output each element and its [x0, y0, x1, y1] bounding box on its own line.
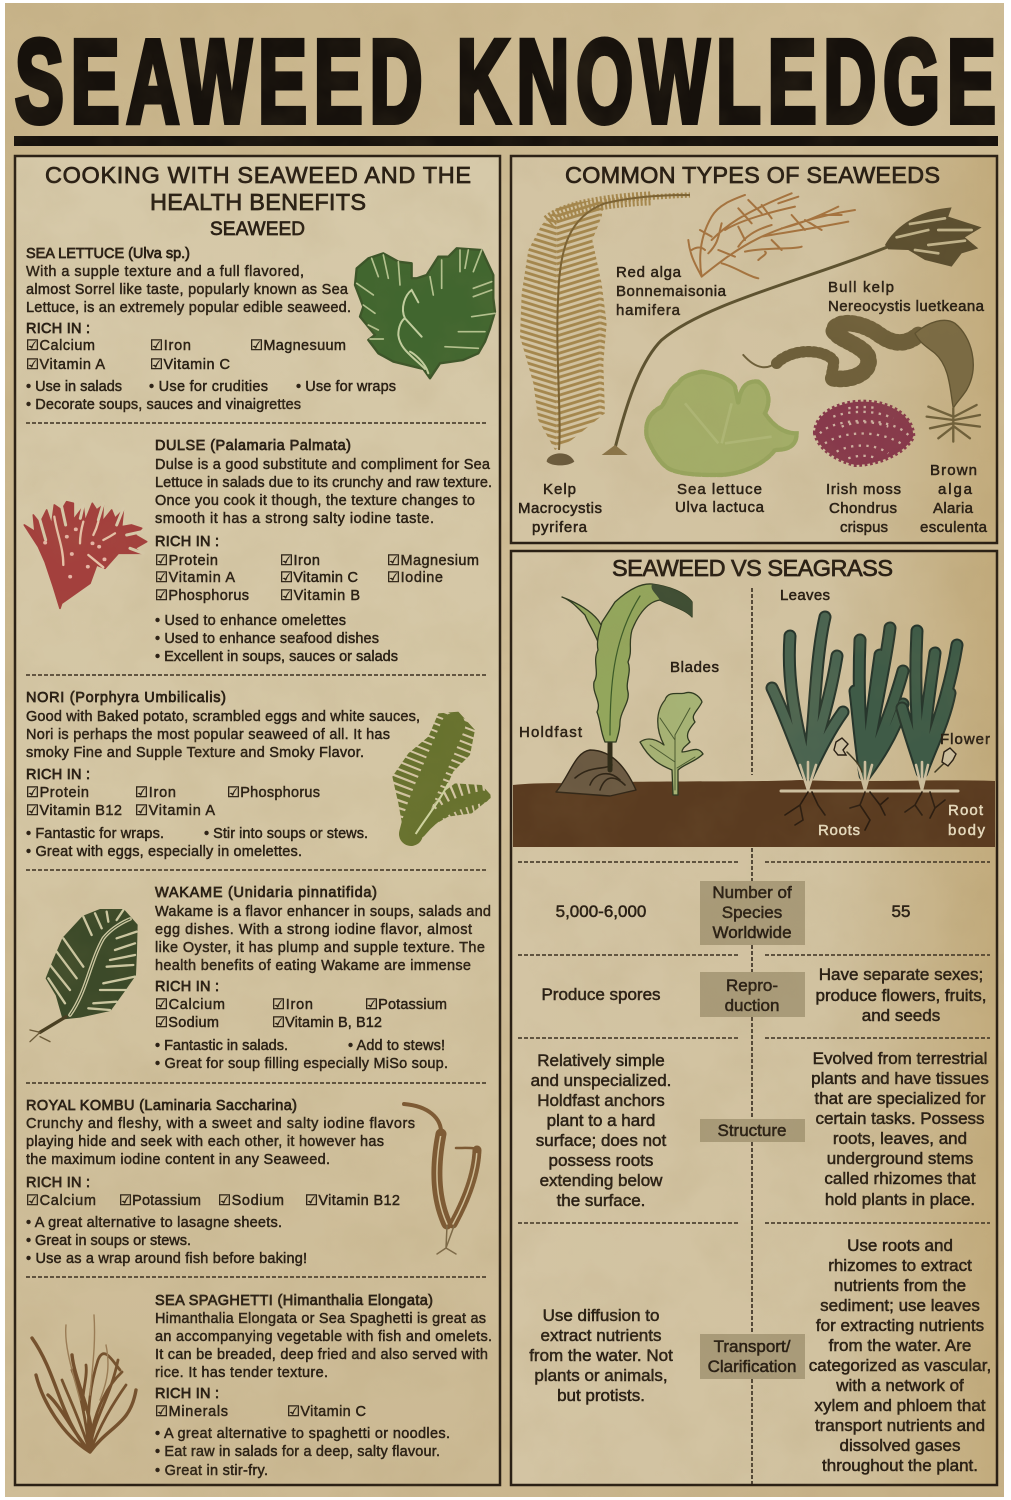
row: transport: [529, 1236, 991, 1475]
label box: structure: [700, 1119, 805, 1142]
nori nutrients: ☑Vitamin B12: [26, 803, 122, 819]
dulse description: [155, 438, 492, 527]
icon: sea lettuce: [355, 248, 495, 378]
diagram labels: Blades: [670, 659, 719, 676]
royal kombu uses: [26, 1215, 307, 1267]
wakame description: [155, 885, 491, 974]
label box: number of species: Worldwide: [712, 923, 792, 942]
section: sea spaghetti: [32, 1293, 492, 1479]
seagrass transport text: [809, 1236, 991, 1475]
seagrass transport text: Use roots and: [847, 1236, 953, 1255]
dulse nutrients: ☑Vitamin B: [280, 588, 360, 604]
seagrass transport text: sediment; use leaves: [820, 1296, 980, 1315]
royal kombu nutrients: ☑Vitamin B12: [305, 1193, 400, 1209]
nori nutrients: ☑Phosphorus: [227, 785, 320, 801]
royal kombu description: Crunchy and fleshy, with a sweet and salty iodine flavors: [26, 1116, 415, 1132]
illustration: sea lettuce: [646, 372, 797, 475]
label box: number of species: [700, 881, 805, 945]
dulse nutrients: ☑Vitamin A: [155, 570, 235, 586]
labels: common types: alga: [938, 481, 973, 498]
seagrass plant 2: [855, 628, 903, 775]
diagram labels: Flower: [940, 731, 990, 748]
sea spaghetti uses: • Eat raw in salads for a deep, salty flavour.: [155, 1444, 440, 1460]
seaweed structure text: the surface.: [557, 1191, 645, 1210]
section: nori: [26, 690, 493, 860]
nori nutrients: [26, 767, 320, 819]
wakame nutrients: [155, 979, 447, 1031]
seagrass transport text: transport nutrients and: [815, 1416, 985, 1435]
royal kombu uses: • A great alternative to lasagne sheets.: [26, 1215, 282, 1231]
wakame description: health benefits of eating Wakame are immense: [155, 958, 471, 974]
dulse description: Once you cook it though, the texture changes to: [155, 493, 475, 509]
wakame description: like Oyster, it has plump and supple texture. The: [155, 940, 485, 956]
wakame description: Wakame is a flavor enhancer in soups, salads and: [155, 904, 491, 920]
wakame nutrients: ☑Iron: [272, 997, 313, 1013]
sea lettuce description: SEA LETTUCE (Ulva sp.): [26, 246, 190, 262]
label box: transport: Clarification: [708, 1357, 796, 1376]
dulse nutrients: RICH IN :: [155, 534, 219, 550]
seagrass reproduction text: produce flowers, fruits,: [815, 986, 987, 1005]
labels: common types: hamifera: [616, 302, 681, 319]
dulse uses: • Used to enhance omelettes: [155, 613, 346, 629]
seagrass structure text: roots, leaves, and: [833, 1129, 967, 1148]
sea spaghetti description: Himanthalia Elongata or Sea Spaghetti is great as: [155, 1311, 486, 1327]
dulse uses: • Excellent in soups, sauces or salads: [155, 649, 398, 665]
wakame nutrients: ☑Potassium: [365, 997, 447, 1013]
sea lettuce uses: • Use for wraps: [296, 379, 396, 395]
wakame nutrients: RICH IN :: [155, 979, 219, 995]
sea spaghetti description: rice. It has tender texture.: [155, 1365, 328, 1381]
nori nutrients: ☑Protein: [26, 785, 89, 801]
labels: common types: Bonnemaisonia: [616, 283, 727, 300]
seagrass reproduction text: and seeds: [862, 1006, 940, 1025]
illustration: seaweed plants: [556, 584, 703, 796]
nori uses: • Stir into soups or stews.: [204, 826, 368, 842]
seaweed structure text: plant to a hard: [547, 1111, 655, 1130]
royal kombu nutrients: ☑Calcium: [26, 1193, 96, 1209]
seagrass structure text: Evolved from terrestrial: [813, 1049, 987, 1068]
sea spaghetti description: SEA SPAGHETTI (Himanthalia Elongata): [155, 1293, 433, 1309]
labels: common types: [518, 264, 988, 536]
dulse nutrients: ☑Magnesium: [387, 553, 479, 569]
panel: cooking with seaweed and the health benefits: [15, 156, 500, 1485]
sea lettuce uses: • Decorate soups, sauces and vinaigrettes: [26, 397, 301, 413]
sea lettuce uses: • Use for crudities: [149, 379, 268, 395]
sea spaghetti nutrients: RICH IN :: [155, 1386, 219, 1402]
seaweed structure text: surface; does not: [536, 1131, 666, 1150]
seaweed structure text: Holdfast anchors: [537, 1091, 665, 1110]
icon: sea spaghetti: [32, 1315, 136, 1452]
row: reproduction: Produce spores: [541, 985, 661, 1004]
sea spaghetti uses: • A great alternative to spaghetti or noodles.: [155, 1426, 450, 1442]
dulse nutrients: ☑Vitamin C: [280, 570, 358, 586]
seagrass structure text: that are specialized for: [814, 1089, 986, 1108]
dulse uses: • Used to enhance seafood dishes: [155, 631, 379, 647]
dulse nutrients: ☑Phosphorus: [155, 588, 249, 604]
sea lettuce uses: [26, 379, 396, 413]
illustration: brown alga: [743, 320, 980, 442]
icon: dulse: [24, 502, 147, 608]
royal kombu description: the maximum iodine content in any Seaweed.: [26, 1152, 330, 1168]
sea spaghetti uses: • Great in stir-fry.: [155, 1463, 268, 1479]
row: number of species: 5,000-6,000: [556, 902, 646, 921]
seaweed structure text: Relatively simple: [537, 1051, 665, 1070]
row: number of species: [556, 881, 910, 945]
sea lettuce nutrients: ☑Vitamin A: [26, 357, 105, 373]
row: structure: [531, 1049, 989, 1210]
panel: common types of seaweeds: [505, 156, 997, 543]
seagrass transport text: categorized as vascular,: [809, 1356, 991, 1375]
sea lettuce nutrients: ☑Iron: [150, 338, 191, 354]
seagrass plant 1: [772, 617, 843, 775]
labels: common types: Chondrus: [829, 500, 897, 517]
seagrass transport text: rhizomes to extract: [828, 1256, 972, 1275]
soil band: [513, 780, 995, 847]
section: wakame: [30, 885, 491, 1072]
seagrass structure text: plants and have tissues: [811, 1069, 989, 1088]
icon: royal kombu: [404, 1104, 477, 1254]
diagram labels: Roots: [818, 822, 860, 839]
sea lettuce nutrients: [26, 321, 346, 373]
icon: nori: [410, 710, 493, 840]
seaweed transport text: extract nutrients: [541, 1326, 661, 1345]
dulse description: Dulse is a good substitute and compliment for Sea: [155, 457, 491, 473]
title: SEAWEED KNOWLEDGE: [15, 15, 996, 147]
seagrass transport text: from the water. Are: [829, 1336, 971, 1355]
nori nutrients: ☑Iron: [135, 785, 176, 801]
labels: common types: pyrifera: [532, 519, 588, 536]
row: number of species: 55: [892, 902, 910, 921]
common types heading: COMMON TYPES OF SEAWEEDS: [565, 162, 940, 188]
dulse uses: [155, 613, 398, 665]
sea spaghetti nutrients: ☑Vitamin C: [287, 1404, 366, 1420]
seagrass transport text: with a network of: [835, 1376, 964, 1395]
label box: transport: Transport/: [714, 1337, 791, 1356]
seagrass transport text: throughout the plant.: [822, 1456, 978, 1475]
diagram labels: body: [948, 822, 986, 839]
illustration: bull kelp: [602, 207, 982, 455]
label box: transport: [700, 1334, 805, 1379]
illustration: red alga: [688, 193, 855, 278]
panel heading: SEAWEED: [210, 219, 305, 240]
diagram labels: Root: [948, 802, 984, 819]
seaweed structure text: and unspecialized.: [531, 1071, 671, 1090]
label box: reproduction: duction: [725, 996, 779, 1015]
royal kombu nutrients: ☑Potassium: [119, 1193, 201, 1209]
seagrass flowers: [834, 738, 956, 772]
dulse nutrients: ☑Iodine: [387, 570, 443, 586]
label box: number of species: Species: [722, 903, 782, 922]
dulse description: smooth it has a strong salty iodine taste.: [155, 511, 434, 527]
wakame uses: • Add to stews!: [348, 1038, 445, 1054]
icon: wakame: [30, 910, 137, 1042]
wakame description: egg dishes. With a strong iodine flavor, almost: [155, 922, 472, 938]
sea lettuce nutrients: ☑Vitamin C: [150, 357, 230, 373]
labels: common types: Bull kelp: [828, 279, 894, 296]
nori uses: • Fantastic for wraps.: [26, 826, 164, 842]
sea lettuce description: Lettuce, is an extremely popular edible seaweed.: [26, 300, 351, 316]
sea spaghetti nutrients: [155, 1386, 366, 1420]
sea lettuce description: With a supple texture and a full flavored,: [26, 264, 304, 280]
seaweed transport text: plants or animals,: [534, 1366, 668, 1385]
diagram labels: Holdfast: [519, 724, 583, 741]
seaweed vs seagrass heading: SEAWEED VS SEAGRASS: [612, 555, 893, 581]
seagrass transport text: dissolved gases: [840, 1436, 960, 1455]
seaweed transport text: Use diffusion to: [543, 1306, 659, 1325]
seagrass structure text: [811, 1049, 989, 1209]
seagrass structure text: certain tasks. Possess: [815, 1109, 985, 1128]
sea lettuce uses: • Use in salads: [26, 379, 122, 395]
royal kombu description: [26, 1098, 415, 1168]
sea spaghetti description: It can be breaded, deep fried and also served with: [155, 1347, 488, 1363]
seagrass structure text: underground stems: [827, 1149, 973, 1168]
diagram labels: Leaves: [780, 587, 830, 604]
sea lettuce nutrients: RICH IN :: [26, 321, 90, 337]
labels: common types: Alaria: [933, 500, 974, 517]
sea spaghetti description: an accompanying vegetable with fish and omelets.: [155, 1329, 492, 1345]
labels: common types: esculenta: [920, 519, 988, 536]
dulse nutrients: [155, 534, 479, 604]
label box: number of species: Number of: [712, 883, 792, 902]
label box: reproduction: [700, 972, 805, 1017]
dulse description: DULSE (Palamaria Palmata): [155, 438, 351, 454]
panel heading: COOKING WITH SEAWEED AND THE: [45, 162, 471, 188]
nori description: Nori is perhaps the most popular seaweed of all. It has: [26, 727, 390, 743]
seaweed structure text: possess roots: [549, 1151, 653, 1170]
wakame nutrients: ☑Vitamin B, B12: [272, 1015, 382, 1031]
royal kombu nutrients: [26, 1175, 400, 1209]
panel heading: HEALTH BENEFITS: [150, 189, 366, 215]
dulse description: Lettuce in salads due to its crunchy and raw texture.: [155, 475, 492, 491]
rhizome and roots: [781, 762, 958, 830]
labels: common types: Sea lettuce: [677, 481, 762, 498]
labels: common types: crispus: [840, 519, 888, 536]
labels: common types: Red alga: [616, 264, 682, 281]
nori description: Good with Baked potato, scrambled eggs and white sauces,: [26, 709, 420, 725]
labels: common types: Ulva lactuca: [675, 499, 765, 516]
seagrass transport text: for extracting nutrients: [816, 1316, 984, 1335]
seaweed structure text: extending below: [540, 1171, 663, 1190]
nori nutrients: RICH IN :: [26, 767, 90, 783]
royal kombu uses: • Use as a wrap around fish before baking!: [26, 1251, 307, 1267]
illustration: kelp: [520, 191, 690, 466]
seagrass structure text: hold plants in place.: [825, 1190, 975, 1209]
seagrass transport text: nutrients from the: [834, 1276, 966, 1295]
wakame description: WAKAME (Unidaria pinnatifida): [155, 885, 377, 901]
seaweed structure text: [531, 1051, 671, 1210]
nori description: smoky Fine and Supple Texture and Smoky Flavor.: [26, 745, 364, 761]
wakame uses: [155, 1038, 448, 1072]
sea spaghetti nutrients: ☑Minerals: [155, 1404, 228, 1420]
wakame nutrients: ☑Sodium: [155, 1015, 219, 1031]
seagrass plant 3: [902, 631, 957, 772]
labels: common types: Irish moss: [826, 481, 901, 498]
royal kombu nutrients: RICH IN :: [26, 1175, 90, 1191]
illustration: seagrass plants: [772, 617, 958, 830]
sea lettuce description: [26, 246, 351, 316]
nori uses: [26, 826, 368, 860]
panel heading: [45, 162, 471, 240]
seagrass structure text: called rhizomes that: [824, 1169, 976, 1188]
seagrass transport text: xylem and phloem that: [814, 1396, 986, 1415]
sea spaghetti uses: [155, 1426, 450, 1479]
sea lettuce nutrients: ☑Magnesuum: [250, 338, 346, 354]
label box: reproduction: Repro-: [726, 976, 778, 995]
royal kombu uses: • Great in soups or stews.: [26, 1233, 191, 1249]
nori uses: • Great with eggs, especially in omelettes.: [26, 844, 302, 860]
wakame uses: • Fantastic in salads.: [155, 1038, 288, 1054]
labels: common types: Macrocystis: [518, 500, 602, 517]
wakame uses: • Great for soup filling especially MiSo soup.: [155, 1056, 448, 1072]
sea lettuce nutrients: ☑Calcium: [26, 338, 95, 354]
illustration: irish moss: [815, 402, 913, 465]
labels: common types: Nereocystis luetkeana: [828, 298, 985, 315]
dulse nutrients: ☑Iron: [280, 553, 320, 569]
seaweed transport text: [529, 1306, 673, 1405]
section: dulse: [24, 438, 492, 665]
section: sea lettuce: [26, 246, 495, 413]
row: reproduction: [541, 965, 987, 1025]
label box: structure: Structure: [718, 1121, 786, 1140]
royal kombu description: playing hide and seek with each other, it however has: [26, 1134, 384, 1150]
seagrass reproduction text: [815, 965, 987, 1025]
nori nutrients: ☑Vitamin A: [135, 803, 215, 819]
diagram labels: [519, 587, 990, 839]
sea lettuce description: almost Sorrel like taste, popularly known as Sea: [26, 282, 349, 298]
nori description: [26, 690, 420, 761]
dulse nutrients: ☑Protein: [155, 553, 218, 569]
seaweed transport text: but protists.: [557, 1386, 645, 1405]
labels: common types: Kelp: [543, 481, 576, 498]
royal kombu nutrients: ☑Sodium: [218, 1193, 284, 1209]
labels: common types: Brown: [930, 462, 977, 479]
wakame nutrients: ☑Calcium: [155, 997, 225, 1013]
seagrass reproduction text: Have separate sexes;: [819, 965, 983, 984]
seaweed transport text: from the water. Not: [529, 1346, 673, 1365]
section: royal kombu: [26, 1098, 477, 1267]
nori description: NORI (Porphyra Umbilicalis): [26, 690, 226, 706]
sea spaghetti description: [155, 1293, 492, 1381]
royal kombu description: ROYAL KOMBU (Laminaria Saccharina): [26, 1098, 297, 1114]
panel: seaweed vs seagrass: [511, 551, 997, 1485]
